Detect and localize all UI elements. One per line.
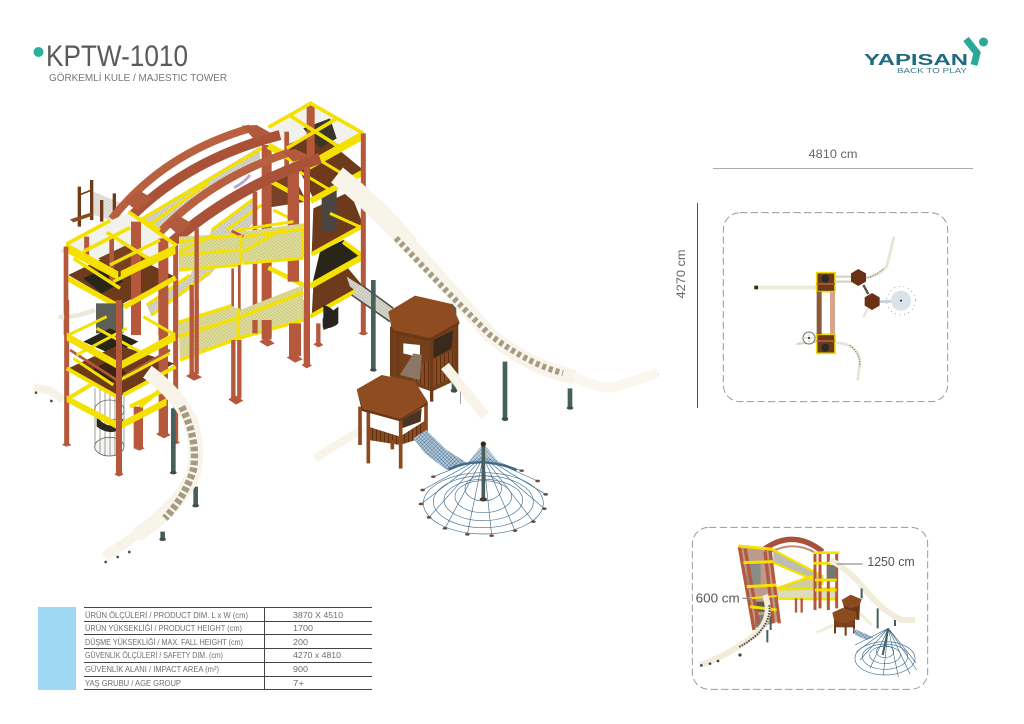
long right slide: [337, 175, 658, 388]
main product illustration: [33, 103, 659, 563]
side: spider net: [853, 628, 917, 677]
row 5: 900: [293, 664, 308, 674]
rear gazebo: [388, 296, 459, 402]
dimension: height: 4270 cm: [674, 250, 688, 298]
subtitle: GÖRKEMLİ KULE / MAJESTIC TOWER: [49, 71, 227, 84]
side: gazebos: [817, 595, 872, 636]
row 4: GÜVENLİK ÖLÇÜLERİ / SAFETY DIM. (cm): [85, 650, 223, 660]
right tower front post: [304, 167, 310, 366]
spider net: [419, 441, 548, 537]
label: 1250 cm: [837, 555, 915, 569]
dimension: width: 4810 cm: [808, 147, 858, 161]
bridges: [178, 222, 303, 360]
plan: towers: [817, 273, 835, 353]
plan: spiral cage: [803, 332, 815, 344]
logo: YAPISAN: [864, 52, 968, 69]
plan: long left slide: [754, 286, 817, 289]
net walkways between towers: [140, 147, 262, 317]
net tunnel: [352, 285, 393, 322]
front left slide supports: [163, 408, 196, 539]
row 1: [85, 610, 343, 620]
row 4: 4270 x 4810: [293, 650, 341, 660]
row 4: [85, 650, 341, 660]
front gazebo: [315, 375, 428, 469]
row 1: ÜRÜN ÖLÇÜLERİ / PRODUCT DIM. L x W (cm): [85, 610, 248, 620]
rear left slide: [33, 387, 63, 400]
right tower: [255, 103, 370, 335]
row 3: 200: [293, 637, 308, 647]
row 2: ÜRÜN YÜKSEKLİĞİ / PRODUCT HEIGHT (cm): [85, 623, 242, 633]
spiral cage: [95, 303, 124, 456]
row 6: YAŞ GRUBU / AGE GROUP: [85, 678, 181, 688]
side: right tower: [796, 553, 839, 613]
net walkway: [413, 430, 467, 470]
side: left tower: [738, 546, 779, 630]
metal supports: [373, 280, 570, 418]
row 5: [85, 664, 308, 674]
lower structure and posts: [33, 300, 368, 563]
side view panel: [692, 527, 928, 689]
side: long slide: [830, 560, 915, 628]
rear left climbing frame: [70, 180, 122, 227]
specifications table: [84, 607, 372, 690]
arches: [112, 125, 320, 250]
label: 1250 cm: 1250 cm: [867, 555, 915, 569]
plan: spider net: [880, 286, 915, 315]
post footings: [186, 331, 368, 405]
row 3: DÜŞME YÜKSEKLİĞİ / MAX. FALL HEIGHT (cm): [85, 637, 243, 647]
front left slide: [137, 372, 196, 535]
title: KPTW-1010: [46, 40, 188, 73]
plan view panel: [723, 213, 948, 402]
row 2: 1700: [293, 623, 313, 633]
side: arches: [764, 539, 823, 553]
row 5: GÜVENLİK ALANI / IMPACT AREA (m²): [85, 664, 219, 674]
left tower: [60, 212, 177, 335]
side: left slide: [700, 595, 771, 667]
logo: [864, 38, 988, 75]
logo: BACK TO PLAY: [897, 68, 967, 75]
plan: gazebos: [851, 269, 880, 310]
label: 600 cm: 600 cm: [696, 592, 740, 606]
gazebos, long slide and net: [315, 280, 659, 537]
gazebo slide: [445, 366, 485, 416]
plan: right slides: [797, 237, 894, 381]
row 6: 7+: [293, 678, 304, 688]
blue table accent: [38, 607, 76, 690]
row 1: 3870 X 4510: [293, 610, 343, 620]
row 6: [85, 678, 304, 688]
side: nets and bridges: [773, 550, 837, 600]
black spiral stair: [323, 307, 338, 328]
